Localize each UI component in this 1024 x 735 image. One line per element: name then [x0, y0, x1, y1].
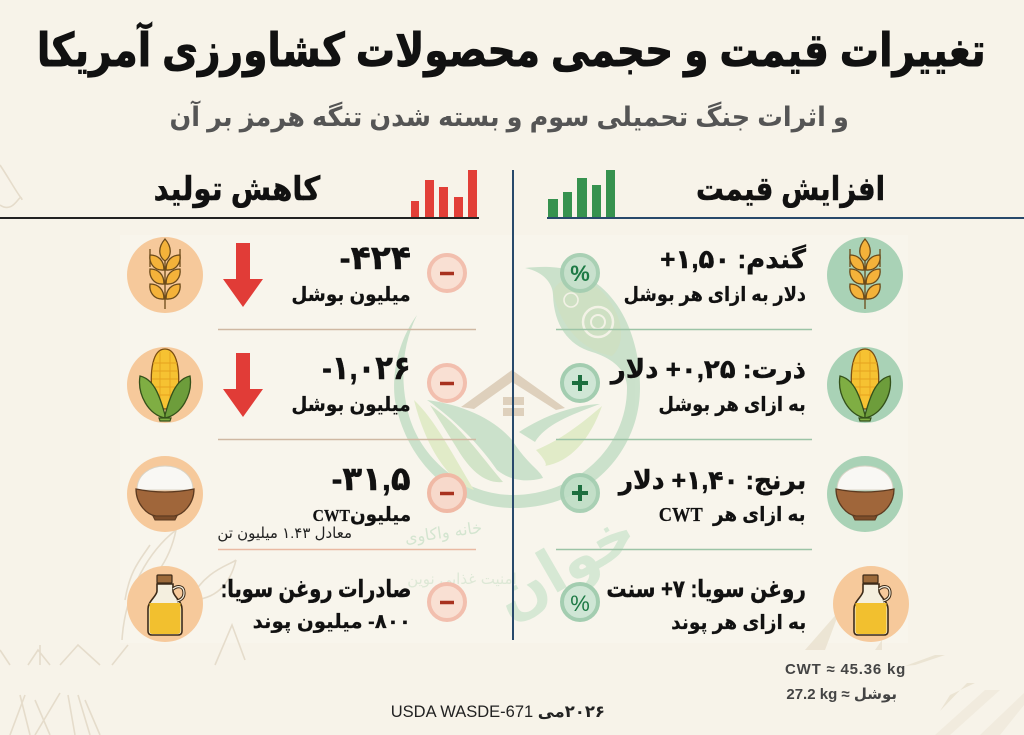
text: rice tonnes note: معادل ۱.۴۳ میلیون تن [217, 525, 352, 542]
icon: rice on green [827, 456, 903, 532]
text: wheat decrease unit: میلیون بوشل [292, 284, 411, 306]
watermark lettering: خوان [481, 497, 649, 633]
panel: price increase items [827, 237, 909, 642]
watermark lettering: امنیت غذایی نوین [407, 570, 517, 588]
text: rice price: برنج: ۱,۴۰+ دلار [619, 465, 806, 495]
icon: rice on orange [127, 456, 203, 532]
text: soybean oil price: روغن سویا: ۷+ سنت [607, 576, 806, 603]
text: wheat unit: دلار به ازای هر بوشل [624, 284, 806, 306]
subtitle: و اثرات جنگ تحمیلی سوم و بسته شدن تنگه هرمز بر آن [170, 102, 849, 132]
text: wheat price: گندم: ۱,۵۰+ [660, 244, 806, 274]
panel: production decrease icons [127, 237, 203, 642]
heading: price increase: افزایش قیمت [696, 170, 885, 207]
text: soybean oil export: صادرات روغن سویا: [220, 576, 411, 603]
vertical centre divider [512, 170, 514, 640]
text: corn decrease unit: میلیون بوشل [292, 394, 411, 416]
icon: oil on orange [833, 566, 909, 642]
title: تغییرات قیمت و حجمی محصولات کشاورزی آمریکا [37, 24, 986, 76]
text: wheat decrease value: ۴۲۴- [340, 239, 411, 276]
icon: wheat on green [827, 237, 903, 313]
text: rice decrease value: ۳۱,۵- [332, 460, 411, 497]
badge: percent wheat: % [570, 261, 590, 286]
watermark lettering: خانه واکاوی [404, 518, 483, 548]
source line: ۲۰۲۶می USDA WASDE-671 [391, 702, 605, 721]
icon: oil on orange [127, 566, 203, 642]
note: bushel conversion: بوشل ≈ 27.2 kg [786, 686, 897, 703]
watermark lettering [404, 497, 649, 633]
text: corn unit: به ازای هر بوشل [659, 394, 806, 416]
text: soybean oil unit: به ازای هر پوند [671, 612, 806, 634]
icon: corn on green [827, 347, 903, 423]
text: corn decrease value: ۱,۰۲۶- [322, 349, 411, 386]
note: CWT conversion: CWT ≈ 45.36 kg [785, 661, 906, 678]
text: corn price: ذرت: ۰,۲۵+ دلار [611, 354, 806, 384]
text: rice decrease unit: میلیونCWT [312, 504, 411, 526]
icon: wheat on orange [127, 237, 203, 313]
text: soybean oil export value: ۸۰۰- میلیون پوند [253, 611, 411, 633]
icon: corn on orange [127, 347, 203, 423]
text: rice unit: به ازای هر CWT [659, 504, 806, 526]
badge: percent oil: % [570, 591, 590, 616]
heading: production decrease: کاهش تولید [153, 170, 320, 207]
